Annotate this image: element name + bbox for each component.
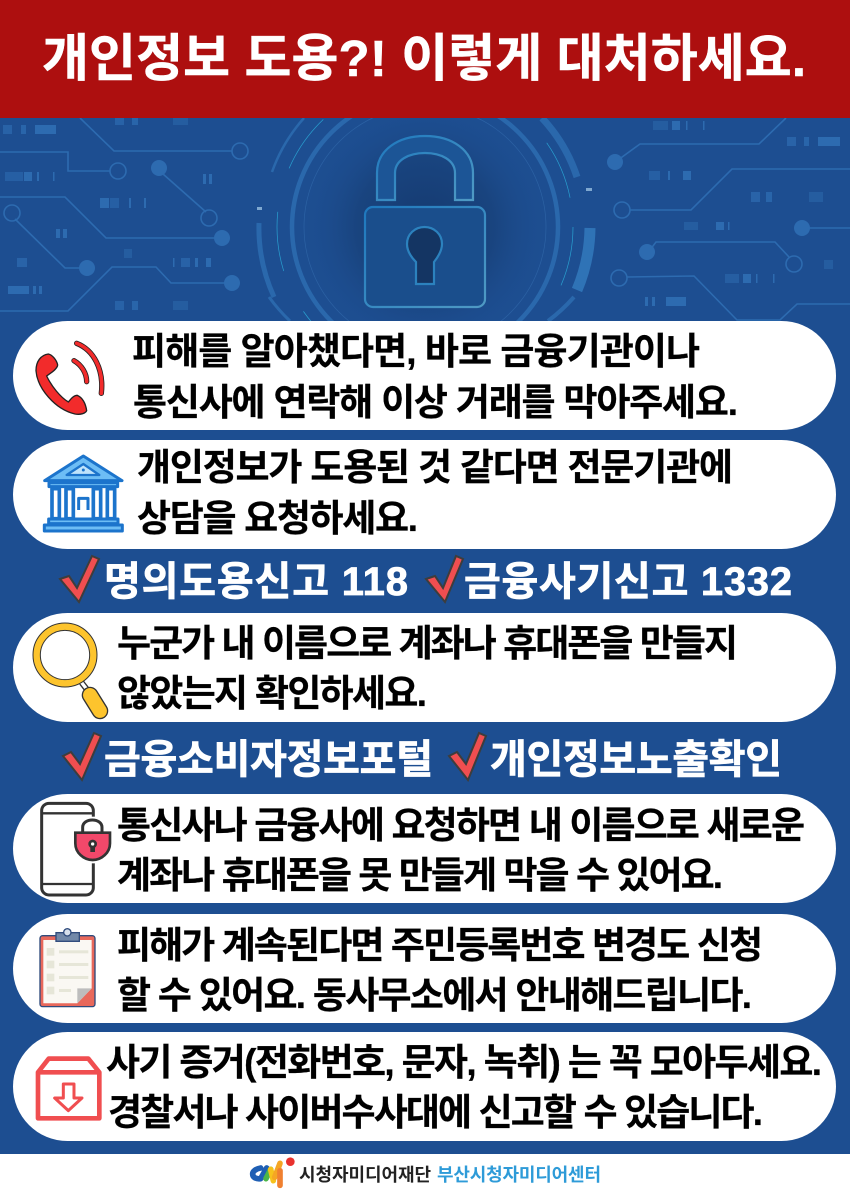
- footer: [0, 1154, 850, 1199]
- text: call instructions: [132, 331, 738, 423]
- text: block new accounts: 계좌나 휴대폰을 못 만들게 막을 수 있어요.: [117, 855, 723, 896]
- text: block new accounts: [117, 805, 805, 896]
- text: collect evidence: 사기 증거(전화번호, 문자, 녹취) 는 꼭 모아두세요.: [106, 1042, 822, 1083]
- icon: box with down arrow: [38, 1059, 99, 1118]
- check item: 명의도용신고 118: 명의도용신고 118: [104, 560, 408, 604]
- hero: circuit board background with padlock: [0, 79, 850, 375]
- panel: change resident number: [13, 914, 836, 1023]
- text: counselling request: [137, 447, 733, 539]
- text: check accounts: [117, 623, 738, 714]
- text: counselling request: 개인정보가 도용된 것 같다면 전문기관에: [137, 447, 733, 488]
- text: call instructions: 피해를 알아챘다면, 바로 금융기관이나: [132, 331, 700, 372]
- text: collect evidence: [106, 1042, 822, 1133]
- check item: 개인정보노출확인: 개인정보노출확인: [490, 738, 782, 782]
- check item: 금융사기신고 1332: 금융사기신고 1332: [464, 560, 792, 604]
- title banner: [0, 0, 850, 118]
- center name: 부산시청자미디어센터: [437, 1165, 601, 1185]
- padlock: [365, 136, 485, 307]
- icon: magnifying glass: [37, 627, 110, 721]
- icon: phone: [36, 343, 102, 414]
- panel: request counselling: [13, 440, 836, 549]
- text: collect evidence: 경찰서나 사이버수사대에 신고할 수 있습니다.: [108, 1092, 763, 1133]
- panel: check accounts in your name: [13, 613, 836, 722]
- panel: call the bank or carrier: [13, 321, 836, 430]
- foundation name: 시청자미디어재단: [299, 1165, 431, 1185]
- icon: clipboard: [40, 929, 95, 1007]
- check item: 금융소비자정보포털: 금융소비자정보포털: [104, 738, 433, 782]
- panel: block new accounts: [13, 794, 836, 903]
- text: change resident number: 피해가 계속된다면 주민등록번호 변경도 신청: [117, 925, 763, 966]
- icon: smartphone with lock: [42, 803, 113, 895]
- logo mark: [253, 1157, 295, 1185]
- text: call instructions: 통신사에 연락해 이상 거래를 막아주세요.: [133, 382, 738, 423]
- text: change resident number: 할 수 있어요. 동사무소에서 안내해드립니다.: [117, 975, 752, 1016]
- text: counselling request: 상담을 요청하세요.: [137, 498, 418, 539]
- panel: collect evidence: [13, 1032, 836, 1141]
- text: check accounts: 누군가 내 이름으로 계좌나 휴대폰을 만들지: [117, 623, 738, 664]
- title banner: 개인정보 도용?! 이렇게 대처하세요.: [42, 30, 806, 87]
- text: check accounts: 않았는지 확인하세요.: [117, 673, 427, 714]
- text: block new accounts: 통신사나 금융사에 요청하면 내 이름으로 새로운: [117, 805, 805, 846]
- icon: bank building: [44, 456, 122, 531]
- text: change resident number: [117, 925, 763, 1016]
